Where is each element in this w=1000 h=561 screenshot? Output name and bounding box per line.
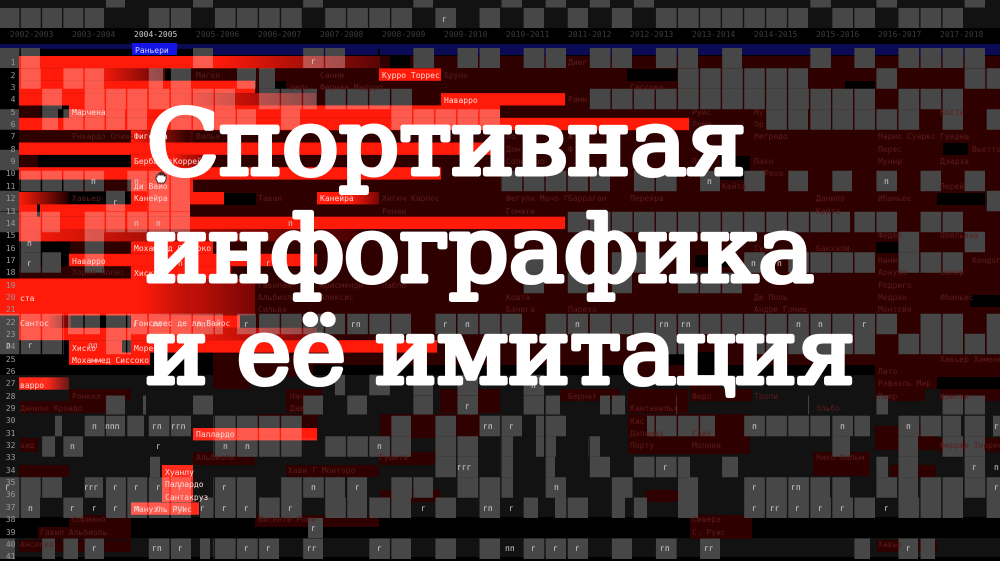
goal and pass marks: г (244, 544, 249, 553)
title (146, 91, 855, 405)
goal and pass marks: п (91, 177, 96, 186)
goal and pass marks: г (818, 504, 823, 513)
row numbers: 24 (6, 342, 16, 351)
dim player names: Дом (506, 145, 521, 154)
goal and pass marks: г (244, 504, 249, 513)
goal and pass marks: п (178, 259, 183, 268)
goal and pass marks: г (840, 504, 845, 513)
dim player names: Перей (940, 182, 964, 191)
bright player names: Сантос (20, 319, 49, 328)
title line 3: и её имитация (146, 300, 855, 405)
coach label: Раньери (132, 43, 177, 55)
column season headers: 2012-2013 (630, 30, 674, 39)
goal and pass marks: г (994, 483, 999, 492)
goal and pass marks: г (994, 422, 999, 431)
goal and pass marks: г (906, 544, 911, 553)
dim player names: Барраган (568, 194, 607, 203)
goal and pass marks: гг (704, 544, 714, 553)
dim player names: Бруно (444, 71, 468, 80)
dim player names: Роме (692, 120, 711, 129)
dim player names: Санни (320, 71, 344, 80)
dim player names: Хорхе Лопес (72, 268, 125, 277)
row numbers: 16 (6, 244, 16, 253)
goal and pass marks: гп (791, 483, 801, 492)
dim player names: Бакхали (816, 244, 850, 253)
goal and pass marks: г (795, 504, 800, 513)
goal and pass marks: г (133, 320, 138, 329)
dim player names: Тропи (754, 392, 778, 401)
dim player names: рель (290, 83, 309, 92)
dim player names: Хигич Карлос (382, 194, 440, 203)
column season headers: 2010-2011 (506, 30, 550, 39)
goal and pass marks: п (92, 422, 97, 431)
dim player names: Сивера (692, 515, 721, 524)
dim player names: Сусо (754, 244, 773, 253)
bright player names: Сантакруз (165, 493, 209, 502)
dim player names: Гайя (692, 429, 711, 438)
goal and pass marks: г (266, 544, 271, 553)
dim player names: Сориано (72, 515, 106, 524)
goal and pass marks: г (884, 504, 889, 513)
dim player names: Сольдадо (506, 157, 545, 166)
goal and pass marks: п (752, 422, 757, 431)
goal and pass marks: п (751, 259, 756, 268)
row numbers: 9 (11, 157, 16, 166)
goal and pass marks: г (509, 504, 514, 513)
goal and pass marks: ггг (84, 483, 98, 492)
dim player names: Кошта (506, 293, 530, 302)
row numbers: 2 (11, 71, 16, 80)
goal and pass marks: г (311, 524, 316, 533)
row numbers: 12 (6, 194, 16, 203)
goal and pass marks: гп (351, 320, 361, 329)
dim player names: Гавил Альбиоль (40, 527, 108, 537)
goal and pass marks: пп (505, 544, 515, 553)
dim player names: Перейра (630, 194, 664, 203)
dim player names: Негредо (754, 132, 788, 141)
goal and pass marks: п (906, 422, 911, 431)
dim player names: Федо (692, 392, 711, 401)
bright player names: Канейра (320, 194, 354, 203)
mark: г (442, 15, 447, 24)
dim player names: Орельяна (940, 231, 979, 240)
goal and pass marks: п (777, 259, 782, 268)
goal and pass marks: г (752, 483, 757, 492)
goal and pass marks: п (554, 483, 559, 492)
dim player names: Кейта (816, 207, 840, 216)
goal and pass marks: г (752, 504, 757, 513)
goal and pass marks: ггг (457, 463, 471, 472)
goal and pass marks: г (92, 504, 97, 513)
goal and pass marks: п (796, 320, 801, 329)
column season headers: 2003-2004 (72, 30, 116, 39)
row numbers: 4 (11, 95, 16, 104)
goal and pass marks: г (113, 504, 118, 513)
row numbers: 40 (6, 540, 16, 549)
column season headers: 2013-2014 (692, 30, 736, 39)
goal and pass marks: гп (196, 320, 206, 329)
goal and pass marks: п (840, 422, 845, 431)
bright player names: Фигейра (134, 132, 168, 141)
dim player names: Солер (940, 268, 964, 277)
dim player names: Пабло (382, 280, 406, 290)
dim player names: Даламау (630, 429, 664, 438)
goal and pass marks: г (575, 544, 580, 553)
goal and pass marks: г (5, 483, 10, 492)
goal and pass marks: г (862, 320, 867, 329)
row numbers: 33 (6, 453, 16, 462)
dim player names: Де Поль (754, 293, 788, 302)
goal and pass marks: п (135, 504, 140, 513)
goal and pass marks: г (92, 544, 97, 553)
row numbers: 38 (6, 515, 16, 524)
dim player names: Фегули Мачо Г (506, 194, 569, 203)
goal and pass marks: гг (770, 504, 780, 513)
goal and pass marks: гп (152, 544, 162, 553)
dim player names: Мунир (878, 157, 902, 166)
row numbers: 39 (6, 528, 16, 537)
dim player names: Парехо (568, 305, 597, 314)
goal and pass marks: п (288, 219, 293, 228)
dim player names: Данило (816, 194, 845, 203)
goal and pass marks: г (156, 483, 161, 492)
dim player names: Даниэл Кроадо (20, 404, 83, 413)
goal and pass marks: п (994, 463, 999, 472)
goal and pass marks: п (311, 483, 316, 492)
dim player names: Рехо (764, 169, 783, 178)
row numbers: 27 (6, 379, 16, 388)
bright player names: Паллардо (196, 430, 235, 439)
dim player names: Хавье (878, 540, 902, 549)
dim player names: Ф (568, 145, 573, 154)
column season headers (10, 30, 984, 39)
bright player names: Мохаммед Сиссоко (134, 244, 211, 253)
dim player names: Гавилан (258, 281, 292, 290)
goal and pass marks: п (28, 504, 33, 513)
dim player names: Вилья (196, 132, 220, 141)
row numbers: 20 (6, 293, 16, 302)
dim player names: Бернат (568, 392, 597, 401)
goal and pass marks: г (311, 57, 316, 66)
row numbers: 19 (6, 281, 16, 290)
goal and pass marks: г (222, 483, 227, 492)
dim player names: Пако (754, 157, 773, 166)
name: Мигел (196, 71, 220, 80)
goal and pass marks: п (707, 177, 712, 186)
row numbers: 10 (6, 169, 16, 178)
goal and pass marks: г (663, 463, 668, 472)
dim player names: Нач (290, 392, 305, 401)
goal and pass marks: г (244, 320, 249, 329)
goal and pass marks: п (70, 442, 75, 451)
goal and pass marks: г (377, 544, 382, 553)
column season headers: 2008-2009 (382, 30, 426, 39)
goal and pass marks: ггп (171, 422, 186, 431)
bright player names: Мануэль Руис (134, 505, 192, 514)
dim player names: Порту (630, 441, 654, 450)
dim player names: Молина (692, 441, 721, 450)
goal and pass marks: п (223, 442, 228, 451)
number: 1 (11, 58, 16, 67)
dim player names: Перес (878, 145, 902, 154)
dim player names: Таван (258, 194, 282, 203)
row numbers: 23 (6, 330, 16, 339)
bright player names: Гонсалес де ла Вайос (134, 319, 231, 328)
goal and pass marks: гп (660, 544, 670, 553)
dim player names: Нани (878, 256, 897, 265)
row numbers: 36 (6, 490, 16, 499)
dim player names: Ж (568, 132, 573, 141)
goal and pass marks: г (27, 259, 32, 268)
dim player names: Кристи (940, 392, 969, 401)
goal and pass marks: п (245, 442, 250, 451)
goal and pass marks: г (465, 402, 470, 411)
column season headers: 2016-2017 (878, 30, 922, 39)
row numbers: 17 (6, 256, 16, 265)
black gaps in dark rows (38, 56, 1000, 389)
row numbers: 21 (6, 305, 16, 314)
dim player names: Ибаньес (878, 193, 912, 203)
row numbers: 3 (11, 83, 16, 92)
row numbers: 32 (6, 441, 16, 450)
dim player names: Фернан Мадуро (320, 83, 383, 92)
goal and pass marks: п (531, 381, 536, 390)
row numbers: 30 (6, 416, 16, 425)
row numbers: 8 (11, 145, 16, 154)
bright player names: Наварро (72, 257, 106, 266)
dim player names: Эльбо (816, 403, 840, 413)
name: Курро Торрес (382, 71, 440, 80)
dim player names: Арисменди (320, 281, 364, 290)
dim player names: Араухо (878, 268, 907, 277)
row numbers: 11 (6, 182, 16, 191)
column season headers: 2004-2005 (134, 30, 178, 39)
bright red bars (0, 56, 689, 515)
dim player names: Рами (568, 95, 587, 104)
bright player names: Хиско (72, 344, 96, 353)
icon: hand cursor (156, 172, 166, 183)
column season headers: 2005-2006 (196, 30, 240, 39)
goal and pass marks: г (113, 483, 118, 492)
dim player names: Ибаньес (940, 292, 974, 302)
bright player names: Марчена (72, 108, 106, 117)
row numbers: 7 (11, 132, 16, 141)
goal and pass marks: г (553, 544, 558, 553)
coach label: Раньери: Раньери (135, 46, 169, 55)
row numbers: 15 (6, 231, 16, 240)
goal and pass marks: гп (659, 320, 669, 329)
goal and pass marks: п (818, 320, 823, 329)
goal and pass marks: г (156, 504, 161, 513)
goal and pass marks: гп (483, 422, 493, 431)
dim player names: Альбиоль (196, 452, 235, 462)
goal and pass marks: п (884, 177, 889, 186)
dim player names: Монтойя (878, 305, 912, 314)
goal and pass marks: г (443, 320, 448, 329)
dim player names: Гомати (506, 207, 535, 216)
column season headers: 2009-2010 (444, 30, 488, 39)
title line 1: Спортивная (147, 91, 746, 196)
goal and pass marks: г (509, 422, 514, 431)
bright player names: Бербатов (134, 156, 173, 166)
bright player names: Коррей (173, 157, 202, 166)
dim player names: Алексис (320, 293, 354, 302)
row numbers: 29 (6, 404, 16, 413)
row numbers: 41 (6, 552, 16, 561)
row numbers: 34 (6, 466, 16, 475)
bright player names: Канейра (134, 194, 168, 203)
goal and pass marks: пп (175, 504, 185, 513)
dim player names: Гуедеш (940, 132, 969, 141)
dim player names: Ансиско (20, 540, 54, 549)
goal and pass marks: г (200, 504, 205, 513)
bright player names (20, 71, 478, 514)
blue coach band (0, 44, 1000, 55)
goal and pass marks: г (355, 483, 360, 492)
goal and pass marks: г (266, 259, 271, 268)
bright player names: ди Вайо (134, 182, 168, 191)
dim player names: Андре Гомиш (754, 305, 807, 314)
goal and pass marks: гп (681, 320, 691, 329)
dim player names: Пьер (878, 392, 897, 401)
goal and pass marks: ппп (105, 422, 120, 431)
dim player names: Диег (568, 58, 587, 67)
dim player names: Хо (506, 132, 516, 141)
row numbers: 5 (11, 108, 16, 117)
goal and pass marks: гп (152, 320, 162, 329)
goal and pass marks: п (465, 320, 470, 329)
dim player names: Кейта (722, 182, 746, 191)
dim player names: Рафаэль Мир (878, 379, 931, 388)
dim player names: Дав (290, 404, 304, 413)
dim player names: Марио Суарес (878, 132, 936, 141)
column season headers: 2011-2012 (568, 30, 612, 39)
goal and pass marks: г (222, 504, 227, 513)
row numbers (6, 58, 16, 561)
goal and pass marks: г (28, 341, 33, 350)
dim player names: вид (20, 441, 35, 450)
goal and pass marks: п (6, 341, 11, 350)
goal and pass marks: п (156, 219, 161, 228)
dim player names: Федер (878, 231, 902, 240)
goal and pass marks: гп (483, 504, 493, 513)
dim player names: Ренан (382, 207, 406, 216)
bright player names: Паллардо (165, 480, 204, 489)
dim player names: Хавьер (72, 194, 101, 203)
goal and pass marks: п (134, 177, 139, 186)
dim player names: Ронкел (72, 392, 101, 401)
column season headers: 2017-2018 (940, 30, 984, 39)
dim player names: Гуаита (379, 453, 408, 462)
goal and pass marks: г (178, 544, 183, 553)
dim player names: Лато (878, 367, 897, 376)
dim player names: Сиссоко (630, 83, 664, 92)
goal and pass marks: г (134, 483, 139, 492)
dim player names: Хави Г Монторо (288, 466, 356, 475)
row numbers: 31 (6, 429, 16, 438)
dim player names: Ор (754, 120, 764, 129)
row numbers: 37 (6, 503, 16, 512)
row numbers: 26 (6, 367, 16, 376)
dim player names: Сильва (258, 305, 287, 314)
dim player names: С. Руис (692, 528, 726, 537)
row numbers: 25 (6, 355, 16, 364)
column season headers: 2014-2015 (754, 30, 798, 39)
goal and pass marks: п (27, 239, 32, 248)
goal and pass marks: г (531, 544, 536, 553)
bright player names: Мохаммед Сиссоко (72, 356, 149, 365)
dim player names: Дзадза (940, 157, 969, 166)
row numbers: 28 (6, 392, 16, 401)
bright player names: ста (20, 294, 35, 303)
column season headers: 2007-2008 (320, 30, 364, 39)
row numbers: 6 (11, 120, 16, 129)
bright player names: Хиско (134, 269, 158, 278)
dim player names: Пли (692, 157, 707, 166)
goal and pass marks: пп (88, 341, 98, 350)
dim player names: Альбиоль (258, 292, 297, 302)
goal and pass marks: г (421, 504, 426, 513)
dim player names: Висенте Рони (258, 515, 316, 524)
dim player names: Рикардо Оливо (72, 132, 135, 141)
bright player names: варро (20, 381, 44, 390)
goal and pass marks: г (156, 442, 161, 451)
dim player names: Коста (940, 108, 964, 117)
title line 2: инфографика (146, 198, 814, 303)
dim player names: Руис (692, 108, 711, 117)
row numbers: 35 (6, 478, 16, 487)
bright player names: Наварро (444, 96, 478, 105)
goal and pass marks: г (972, 463, 977, 472)
row numbers: 18 (6, 268, 16, 277)
goal and pass marks: г (178, 483, 183, 492)
column season headers: 2015-2016 (816, 30, 860, 39)
goal and pass marks: г (113, 198, 118, 207)
season label: 2002-2003 (10, 30, 54, 39)
bright player names: Хуанлу (165, 468, 194, 477)
goal and pass marks: гп (152, 422, 162, 431)
row numbers: 13 (6, 207, 16, 216)
goal and pass marks: г (70, 504, 75, 513)
dim player names: Кас (630, 417, 645, 426)
row numbers: 22 (6, 318, 16, 327)
dim player names: Му (754, 108, 764, 117)
goal and pass marks: п (377, 442, 382, 451)
dim player names: Медран (878, 293, 907, 302)
goal and pass marks: г (288, 504, 293, 513)
goal and pass marks: п (575, 320, 580, 329)
bright player names: Морено (134, 344, 163, 353)
column season headers: 2006-2007 (258, 30, 302, 39)
row numbers: 14 (6, 219, 16, 228)
goal and pass marks: гг (307, 544, 317, 553)
goal and pass marks: п (134, 219, 139, 228)
dim player names: Нико Кильм (816, 453, 864, 462)
dim player names: Родриго (878, 281, 912, 290)
dim player names: Кантанилья (630, 404, 678, 413)
dim player names: Банега (506, 305, 535, 314)
